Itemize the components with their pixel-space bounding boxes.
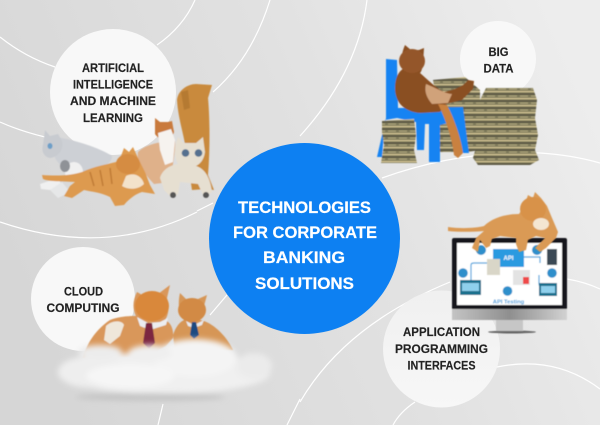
heading: cloud: COMPUTING bbox=[46, 302, 120, 315]
back paper stack bbox=[433, 77, 480, 152]
central title: FOR CORPORATE bbox=[233, 223, 377, 242]
white paw bbox=[104, 321, 124, 344]
heading: AI: LEARNING bbox=[83, 112, 143, 125]
heading: AI: AND MACHINE bbox=[70, 95, 156, 108]
left cat bbox=[83, 285, 173, 358]
central circle bbox=[209, 143, 400, 334]
monitor: API bbox=[503, 256, 514, 262]
central title: TECHNOLOGIES bbox=[238, 198, 371, 217]
cloud bbox=[58, 339, 272, 400]
small paper stack bbox=[381, 119, 417, 163]
panel: cloud computing bbox=[31, 247, 272, 400]
central title: BANKING bbox=[263, 248, 345, 267]
heading: cloud bbox=[46, 286, 120, 315]
front paper stack bbox=[473, 88, 539, 165]
heading: big data: BIG bbox=[488, 46, 508, 59]
cat on monitor bbox=[448, 192, 558, 252]
lying orange cat bbox=[42, 147, 155, 206]
heading: AI: ARTIFICIAL bbox=[82, 62, 144, 75]
central title bbox=[233, 198, 377, 293]
heading: API: PROGRAMMING bbox=[395, 343, 488, 356]
illustration: cats in ties on a cloud bbox=[58, 285, 272, 400]
illustration: cats and robots bbox=[40, 84, 214, 206]
standing cat bbox=[177, 84, 214, 190]
heading: API bbox=[395, 326, 488, 372]
grey robot cat bbox=[40, 130, 112, 198]
illustration: monitor with cat bbox=[448, 192, 567, 334]
panel: artificial intelligence bbox=[40, 29, 214, 206]
blue chair bbox=[377, 59, 469, 162]
illustration: cat on chair with paper stacks bbox=[377, 45, 539, 165]
heading: cloud: CLOUD bbox=[64, 286, 103, 298]
monitor bbox=[452, 238, 567, 334]
heading: AI: INTELLIGENCE bbox=[73, 78, 153, 92]
heading: AI bbox=[70, 62, 156, 125]
right cat bbox=[173, 293, 233, 352]
heading: big data: DATA bbox=[484, 62, 514, 76]
heading: API: INTERFACES bbox=[408, 360, 476, 372]
central title: SOLUTIONS bbox=[255, 274, 354, 293]
white robot cat bbox=[160, 137, 212, 198]
monitor: API Testing bbox=[493, 300, 525, 306]
heading: API: APPLICATION bbox=[403, 326, 480, 339]
panel: big data bbox=[377, 21, 539, 165]
panel: application programming interfaces bbox=[383, 192, 567, 408]
sitting cat bbox=[138, 118, 175, 184]
heading: big data bbox=[484, 46, 514, 76]
cat sitting bbox=[395, 45, 474, 158]
